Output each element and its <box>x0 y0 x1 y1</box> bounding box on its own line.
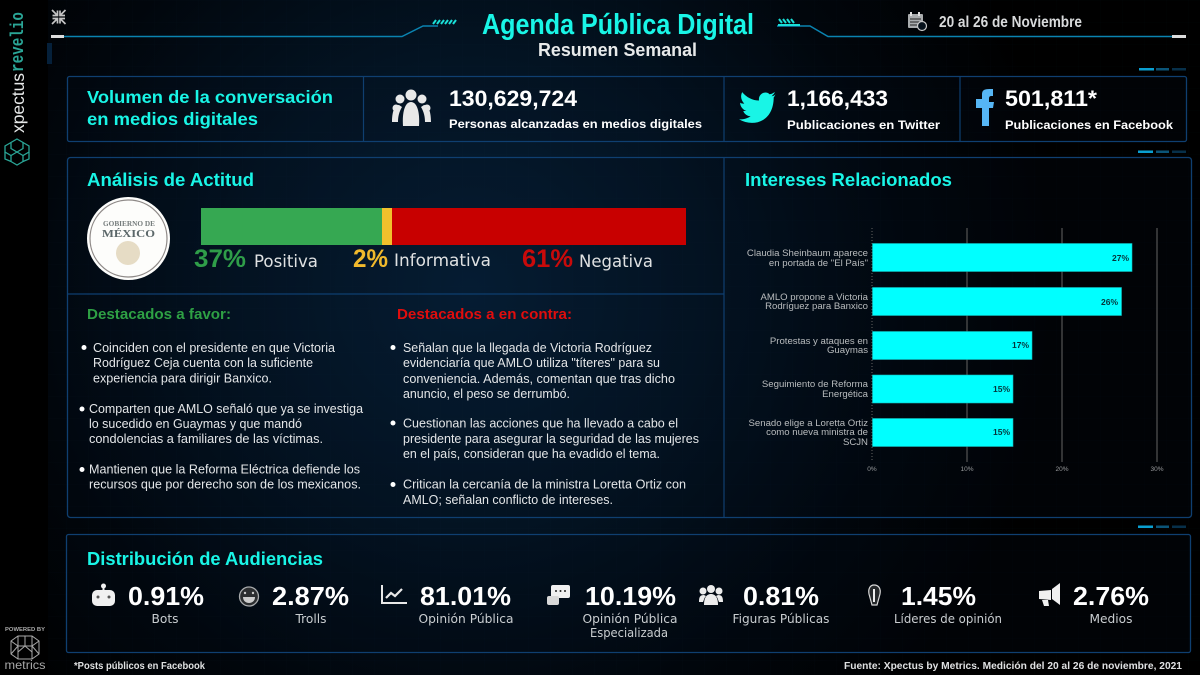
stat: figuras públicas <box>699 581 830 626</box>
panel: análisis de actitud e intereses <box>68 158 1192 518</box>
text block: destacados a favor: experiencia para dirigir Banxico. <box>93 372 272 386</box>
heading: análisis de actitud: Análisis de Actitud <box>87 170 254 190</box>
bar chart: intereses relacionados: en portada de "El País" <box>769 258 868 269</box>
heading: intereses relacionados: Intereses Relacionados <box>745 170 952 190</box>
stat: figuras públicas: Figuras Públicas <box>732 611 830 626</box>
date: 20 al 26 de Noviembre <box>939 14 1082 31</box>
stat: medios <box>1039 581 1149 626</box>
icon: calendar <box>908 12 926 30</box>
header frame lines <box>47 19 1186 64</box>
bar chart: intereses relacionados: Senado elige a Loretta Ortiz <box>749 418 868 429</box>
logo: Gobierno de México <box>87 197 170 280</box>
legend: positiva: 37% <box>194 245 246 273</box>
stat: bots: Bots <box>152 611 178 626</box>
panel: volumen de la conversación: Publicaciones en Facebook <box>1005 118 1173 132</box>
icon: facebook <box>976 89 994 126</box>
stat: facebook: 501,811* <box>1005 86 1097 111</box>
stat: opinión pública especializada: 10.19% <box>585 581 676 611</box>
icon: twitter <box>739 92 776 123</box>
logo: Gobierno de México: MÉXICO <box>102 228 155 240</box>
panel: volumen de la conversación: Personas alcanzadas en medios digitales <box>449 117 702 131</box>
text block: destacados en contra: conveniencia. Además, comentan que tras dicho <box>403 372 675 386</box>
logo: powered by metrics: metrics <box>4 660 46 672</box>
heading: volumen: Volumen de la conversación <box>87 87 333 107</box>
panel: volumen de la conversación <box>68 76 1186 142</box>
bar chart: intereses relacionados: 15% <box>993 427 1010 437</box>
stat: trolls: 2.87% <box>272 581 349 611</box>
bar chart: intereses relacionados <box>747 228 1164 473</box>
panel: distribución de audiencias <box>66 534 1190 652</box>
bar chart: intereses relacionados: SCJN <box>843 437 868 448</box>
heading: destacados en contra: Destacados a en contra: <box>397 306 572 323</box>
bar chart: intereses relacionados: AMLO propone a Victoria <box>760 292 869 303</box>
stat: opinión pública especializada: Opinión Pública <box>582 611 678 626</box>
heading: volumen: en medios digitales <box>87 109 258 129</box>
logo: powered by metrics <box>4 627 46 672</box>
bar chart: intereses relacionados: 26% <box>1101 297 1118 307</box>
stat: personas: 130,629,724 <box>449 86 578 111</box>
text block: destacados a favor: lo sucedido en Guaymas y que mandó <box>89 417 302 431</box>
bar chart: intereses relacionados: 0% <box>867 466 877 473</box>
text block: destacados a favor: Rodríguez Ceja cuenta con la suficiente <box>93 356 313 370</box>
legend: informativa <box>353 245 491 273</box>
bar chart: intereses relacionados: 27% <box>1112 253 1129 263</box>
bar chart: intereses relacionados: Rodríguez para Banxico <box>765 301 868 312</box>
stat: bots <box>92 581 204 626</box>
text block: destacados en contra: anuncio, el peso se derrumbó. <box>403 387 570 401</box>
stat: líderes de opinión: 1.45% <box>901 581 976 611</box>
icon: compress arrows <box>52 10 66 24</box>
text block: destacados a favor: Comparten que AMLO señaló que ya se investiga <box>89 402 363 416</box>
bar chart: intereses relacionados: 10% <box>960 466 974 473</box>
bar chart: intereses relacionados: Guaymas <box>827 345 868 356</box>
sidebar logo: xpectus revelio <box>5 12 29 165</box>
stat: trolls: Trolls <box>295 611 326 626</box>
stat: líderes de opinión <box>869 581 1002 626</box>
text block: destacados en contra: Cuestionan las acciones que ha llevado a cabo el <box>403 416 678 430</box>
text block: destacados en contra: en el país, consideran que ha evadido el tema. <box>403 447 660 461</box>
source: Fuente: Xpectus by Metrics. Medición del 20 al 26 de noviembre, 2021 <box>844 661 1182 672</box>
text block: destacados a favor: condolencias a familiares de las víctimas. <box>89 432 323 446</box>
bar chart: intereses relacionados: como nueva ministra de <box>766 427 868 438</box>
icon: people <box>392 90 431 126</box>
bar chart: intereses relacionados: Protestas y ataques en <box>770 336 868 347</box>
stat: opinión pública <box>382 581 514 626</box>
legend: positiva <box>194 245 318 273</box>
stat: opinión pública especializada <box>547 581 678 640</box>
legend: negativa: Negativa <box>579 252 653 271</box>
stat: figuras públicas: 0.81% <box>743 581 819 611</box>
stat: opinión pública: Opinión Pública <box>418 611 514 626</box>
legend: positiva: Positiva <box>254 252 318 271</box>
stat: bots: 0.91% <box>128 581 204 611</box>
text block: destacados en contra: Critican la cercanía de la ministra Loretta Ortiz con <box>403 478 686 492</box>
stat: líderes de opinión: Líderes de opinión <box>894 611 1002 626</box>
logo: powered by metrics: POWERED BY <box>5 627 45 633</box>
text block: destacados a favor: recursos que por derecho son de los mexicanos. <box>89 478 361 492</box>
text block: destacados en contra: Señalan que la llegada de Victoria Rodríguez <box>403 341 652 355</box>
legend: negativa: 61% <box>522 245 573 273</box>
subtitle: Resumen Semanal <box>538 40 697 60</box>
text block: destacados en contra <box>390 341 699 507</box>
text block: destacados a favor <box>80 341 363 492</box>
stat: opinión pública: 81.01% <box>420 581 511 611</box>
bar chart: intereses relacionados: 20% <box>1055 466 1069 473</box>
text block: destacados a favor: Mantienen que la Reforma Eléctrica defiende los <box>89 462 360 476</box>
logo: Gobierno de México: GOBIERNO DE <box>103 220 155 228</box>
title: Agenda Pública Digital <box>482 9 754 41</box>
text block: destacados en contra: presidente para asegurar la seguridad de las mujeres <box>403 432 699 446</box>
legend: negativa <box>522 245 653 273</box>
text block: destacados a favor: Coinciden con el presidente en que Victoria <box>93 341 335 355</box>
bar chart: intereses relacionados: 17% <box>1012 340 1029 350</box>
panel: volumen de la conversación: Publicaciones en Twitter <box>787 118 940 132</box>
stacked attitude bar <box>201 208 686 245</box>
bar chart: intereses relacionados: Energética <box>822 389 869 400</box>
text block: destacados en contra: evidenciaría que AMLO utiliza "títeres" para su <box>403 356 660 370</box>
footnote: *Posts públicos en Facebook <box>74 661 205 672</box>
legend: informativa: 2% <box>353 245 388 273</box>
bar chart: intereses relacionados: Seguimiento de Reforma <box>762 379 869 390</box>
decorative dashes <box>1138 68 1186 528</box>
stat: medios: Medios <box>1090 611 1132 626</box>
bar chart: intereses relacionados: 15% <box>993 384 1010 394</box>
legend: informativa: Informativa <box>394 251 491 270</box>
stat: trolls <box>240 581 349 626</box>
stat: twitter: 1,166,433 <box>787 86 888 111</box>
stat: opinión pública especializada: Especializada <box>590 625 668 640</box>
bar chart: intereses relacionados: 30% <box>1150 466 1164 473</box>
sidebar logo: xpectus revelio: xpectus <box>8 73 28 133</box>
stat: medios: 2.76% <box>1073 581 1149 611</box>
text block: destacados en contra: AMLO; señalan conflicto de intereses. <box>403 493 613 507</box>
heading: destacados a favor: Destacados a favor: <box>87 306 231 323</box>
heading: distribución: Distribución de Audiencias <box>87 549 323 569</box>
bar chart: intereses relacionados: Claudia Sheinbaum aparece <box>747 248 868 259</box>
